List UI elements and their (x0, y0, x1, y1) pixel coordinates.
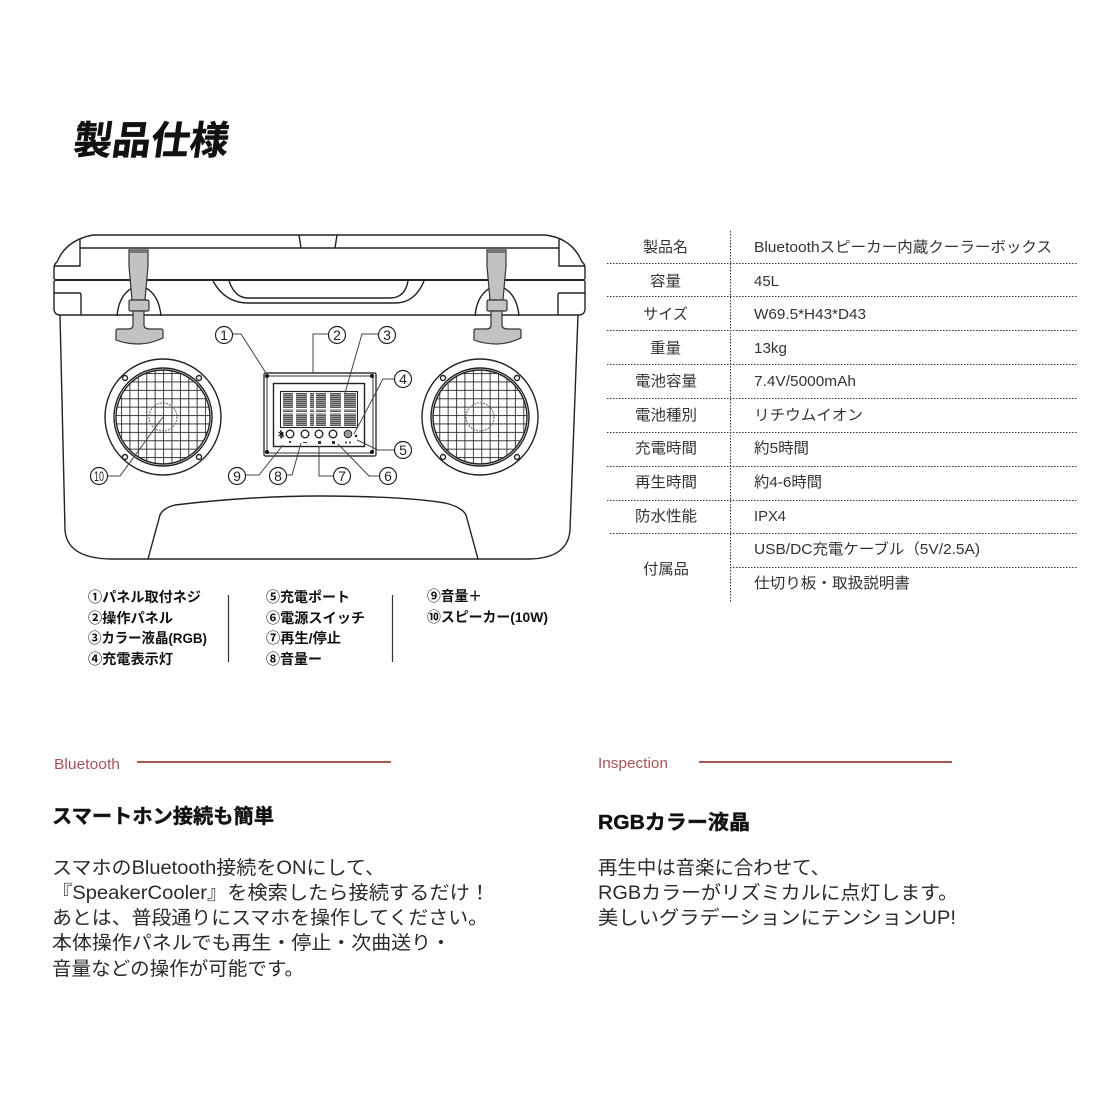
spec labels: 付属品 (643, 561, 689, 578)
buttons (278, 430, 357, 444)
title: 製品仕様 (71, 120, 232, 163)
legend column 3: ⑩スピーカー(10W) (427, 609, 548, 625)
legend column 2: ⑤充電ポート (266, 589, 350, 605)
spec values: IPX4 (754, 508, 786, 525)
callout numbers: 5 (399, 442, 407, 458)
legend column 1: ③カラー液晶(RGB) (88, 630, 207, 646)
spec values: 約5時間 (754, 440, 809, 457)
Bluetooth body text: 音量などの操作が可能です。 (52, 958, 304, 980)
Bluetooth body text (52, 857, 490, 980)
spec labels: サイズ (643, 306, 688, 323)
spec labels: 容量 (650, 273, 681, 290)
Inspection heading: RGBカラー液晶 (598, 811, 750, 834)
legend column 1: ①パネル取付ネジ (88, 589, 201, 605)
spec table (607, 231, 1077, 602)
callout numbers: 7 (338, 468, 346, 484)
Bluetooth body text: あとは、普段通りにスマホを操作してください。 (52, 907, 488, 929)
spec values: Bluetoothスピーカー内蔵クーラーボックス (754, 239, 1052, 256)
spec labels (635, 239, 697, 578)
callout numbers: 1 (220, 327, 228, 343)
legend column 1: ④充電表示灯 (88, 651, 173, 667)
spec labels: 再生時間 (635, 474, 697, 491)
Inspection body text: 美しいグラデーションにテンションUP! (598, 907, 956, 929)
legend column 3: ⑨音量＋ (427, 588, 482, 604)
Bluetooth body text: スマホのBluetooth接続をONにして、 (52, 857, 385, 879)
Bluetooth label: Bluetooth (54, 756, 120, 773)
callout leaders (107, 334, 395, 476)
legend column 2: ⑦再生/停止 (266, 630, 341, 646)
Inspection body text (598, 857, 958, 929)
cooler box diagram (54, 235, 585, 559)
Inspection body text: RGBカラーがリズミカルに点灯します。 (598, 882, 958, 904)
callout numbers: 9 (233, 468, 241, 484)
Bluetooth body text: 『SpeakerCooler』を検索したら接続するだけ！ (52, 882, 490, 904)
spec labels: 防水性能 (635, 508, 697, 525)
legend column 1: ②操作パネル (88, 610, 173, 626)
Bluetooth body text: 本体操作パネルでも再生・停止・次曲送り・ (52, 932, 451, 954)
right latch (474, 250, 521, 344)
spec labels: 電池容量 (635, 373, 697, 390)
bottom recess (148, 496, 478, 559)
Inspection label: Inspection (598, 755, 668, 772)
spec values (754, 239, 1052, 592)
operation panel (264, 373, 376, 456)
spec values: 仕切り板・取扱説明書 (754, 575, 910, 592)
spec values: 13kg (754, 340, 787, 357)
body (54, 281, 585, 559)
spec values: 7.4V/5000mAh (754, 373, 856, 390)
legend column 2 (266, 589, 365, 667)
spec values: リチウムイオン (754, 407, 863, 424)
right speaker (422, 359, 538, 475)
lid seam (54, 279, 585, 281)
lid (54, 235, 585, 279)
left latch (116, 250, 163, 344)
legend column 3 (427, 588, 548, 625)
spec labels: 電池種別 (635, 407, 697, 424)
spec labels: 製品名 (643, 239, 688, 256)
callout numbers (90, 326, 412, 484)
callout numbers: 3 (383, 327, 391, 343)
LCD screen (280, 392, 358, 428)
spec values: W69.5*H43*D43 (754, 306, 866, 323)
spec values: USB/DC充電ケーブル（5V/2.5A) (754, 540, 980, 558)
callout numbers: 6 (384, 468, 392, 484)
spec labels: 充電時間 (635, 440, 697, 457)
callout numbers: 10 (94, 468, 104, 484)
left speaker (105, 359, 221, 475)
handle (213, 281, 424, 303)
spec values: 45L (754, 273, 779, 290)
spec values: 約4-6時間 (754, 474, 822, 491)
callout numbers: 4 (399, 371, 407, 387)
screws (265, 374, 374, 454)
callout numbers: 2 (333, 327, 341, 343)
Inspection body text: 再生中は音楽に合わせて、 (598, 857, 830, 879)
Bluetooth heading: スマートホン接続も簡単 (52, 805, 274, 828)
legend column 1 (88, 589, 207, 667)
section: Bluetooth (52, 756, 490, 980)
spec labels: 重量 (650, 340, 681, 357)
legend column 2: ⑧音量ー (266, 651, 322, 667)
legend (88, 588, 548, 667)
callout numbers: 8 (274, 468, 282, 484)
legend column 2: ⑥電源スイッチ (266, 610, 365, 626)
section: Inspection (598, 755, 958, 929)
